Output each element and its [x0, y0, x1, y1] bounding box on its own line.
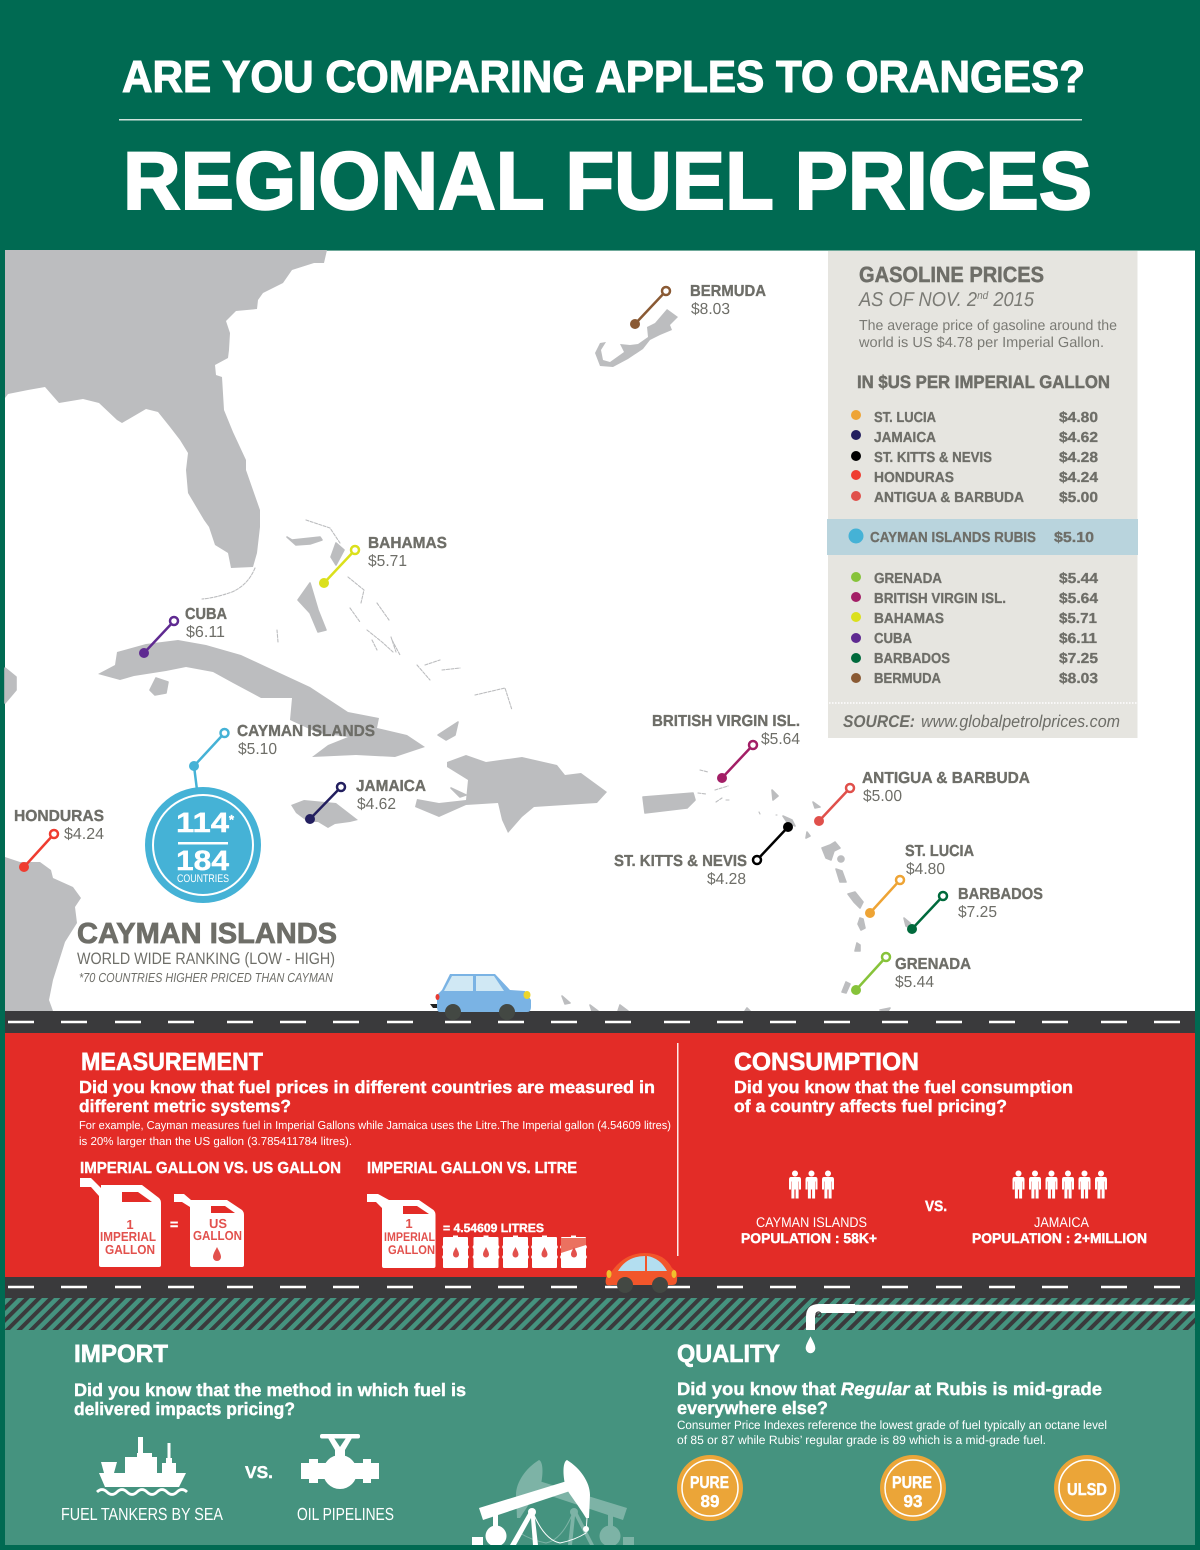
icon: oil pumpjack	[472, 1460, 590, 1546]
measurement question: Did you know that fuel prices in different countries are measured in	[79, 1077, 655, 1097]
road: bottom	[5, 1277, 1195, 1298]
cayman ranking caption: *70 COUNTRIES HIGHER PRICED THAN CAYMAN	[79, 970, 334, 985]
table rows: cheaper: ST. LUCIA	[874, 410, 936, 426]
icon: imperial gallon can: GALLON	[105, 1242, 155, 1257]
jamaica population label: JAMAICA	[1034, 1214, 1090, 1230]
pin: grenada: GRENADA	[895, 956, 971, 973]
import question: delivered impacts pricing?	[74, 1399, 295, 1419]
icon: tanker ship	[97, 1437, 187, 1494]
table row: cayman highlight	[827, 519, 1138, 555]
icon: pipeline valve	[301, 1434, 379, 1489]
cayman ranking caption: WORLD WIDE RANKING (LOW - HIGH)	[77, 950, 335, 968]
table rows: cheaper: $4.62	[1059, 430, 1098, 446]
icon: blue car	[430, 974, 531, 1020]
jamaica population label	[972, 1214, 1147, 1246]
pin: barbados: BARBADOS	[958, 886, 1043, 903]
pin: cayman islands: $5.10	[238, 741, 277, 758]
table rows: cheaper: $5.00	[1059, 490, 1098, 506]
measurement body text: For example, Cayman measures fuel in Imperial Gallons while Jamaica uses the Litre.The Imperial gallon (4.54609 litres)	[79, 1120, 671, 1132]
panel: gasoline prices: world is US $4.78 per Imperial Gallon.	[858, 335, 1104, 351]
icon: litre drums	[442, 1236, 587, 1268]
pin: cayman islands: CAYMAN ISLANDS	[237, 723, 375, 740]
pin: antigua and barbuda: ANTIGUA & BARBUDA	[862, 770, 1030, 787]
source: SOURCE:	[843, 712, 915, 731]
map: caribbean land masses	[5, 250, 914, 1011]
badge: pure 89: 89	[701, 1492, 719, 1511]
map background	[5, 250, 1195, 1011]
pin: bermuda	[630, 283, 766, 329]
quality body text: of 85 or 87 while Rubis’ regular grade is 89 which is a mid-grade fuel.	[677, 1433, 1046, 1447]
icon: cayman population	[789, 1170, 834, 1198]
ranking badge	[145, 787, 261, 903]
pin: jamaica: JAMAICA	[356, 778, 426, 795]
import question	[74, 1380, 466, 1419]
badge: pure 93: PURE	[892, 1473, 932, 1492]
panel: red measurement and consumption	[5, 1033, 1195, 1277]
table rows: dearer: BAHAMAS	[874, 611, 944, 627]
icon: imperial gallon can: IMPERIAL	[100, 1229, 156, 1244]
table rows: cheaper	[851, 410, 1098, 506]
icon: oil pumpjack ghost	[516, 1460, 634, 1546]
table heading: IN $US PER IMPERIAL GALLON	[857, 372, 1110, 392]
cayman population label: POPULATION : 58K+	[741, 1230, 877, 1246]
table rows: cheaper: JAMAICA	[874, 430, 936, 446]
ranking badge: 184	[176, 845, 229, 876]
pin: british virgin islands: $5.64	[761, 731, 800, 748]
icon: imperial gallon can 2	[367, 1194, 436, 1268]
pin: bahamas: $5.71	[368, 553, 407, 570]
icon: jamaica population	[1012, 1170, 1107, 1198]
quality question	[677, 1379, 1102, 1418]
icon: us gallon can: GALLON	[193, 1228, 242, 1243]
panel intro text: The average price of gasoline around the	[859, 318, 1117, 334]
table row: cayman highlight: CAYMAN ISLANDS RUBIS	[870, 530, 1036, 546]
pin: cuba: $6.11	[186, 624, 225, 641]
jamaica population label: POPULATION : 2+MILLION	[972, 1230, 1147, 1246]
icon: imperial gallon can 2: GALLON	[388, 1243, 435, 1257]
table rows: dearer: $6.11	[1059, 631, 1097, 647]
icon: imperial gallon can	[80, 1178, 161, 1267]
quality body text	[677, 1418, 1107, 1447]
pin: cuba: CUBA	[185, 606, 227, 623]
bahamas islands	[298, 583, 326, 632]
pin: barbados	[907, 886, 1043, 934]
panel: teal import and quality	[5, 1298, 1195, 1545]
litres label: = 4.54609 LITRES	[443, 1221, 544, 1235]
pin: grenada: $5.44	[895, 974, 934, 991]
panel: gasoline prices	[827, 251, 1138, 738]
badge: pure 89	[677, 1455, 743, 1521]
icon: us gallon can: US	[209, 1216, 227, 1231]
pin: cayman islands	[189, 723, 375, 790]
consumption question: of a country affects fuel pricing?	[734, 1096, 1007, 1116]
measurement question	[79, 1077, 655, 1116]
panel date: nd	[977, 290, 989, 302]
ranking badge: *	[229, 812, 235, 827]
table rows: dearer: BARBADOS	[874, 651, 950, 667]
table rows: cheaper: $4.24	[1059, 470, 1098, 486]
badge: pure 93: 93	[904, 1492, 922, 1511]
pin: grenada	[851, 953, 971, 995]
consumption question: Did you know that the fuel consumption	[734, 1077, 1073, 1097]
table rows: dearer: $8.03	[1059, 671, 1098, 687]
icon: imperial gallon can: 1	[126, 1217, 134, 1232]
pipelines label: OIL PIPELINES	[297, 1504, 394, 1524]
pin: st kitts and nevis	[614, 822, 793, 888]
pin: bermuda: BERMUDA	[690, 283, 766, 300]
pin: honduras: $4.24	[64, 826, 104, 843]
pin: british virgin islands: BRITISH VIRGIN ISL.	[652, 713, 800, 730]
icon: imperial gallon can 2: IMPERIAL	[384, 1230, 435, 1244]
tanker label: FUEL TANKERS BY SEA	[61, 1504, 223, 1524]
ranking badge: 114	[176, 807, 230, 838]
pin: bahamas: BAHAMAS	[368, 535, 447, 552]
table rows: dearer: CUBA	[874, 631, 912, 647]
pin: bermuda: $8.03	[691, 301, 730, 318]
quality body text: Consumer Price Indexes reference the lowest grade of fuel typically an octane level	[677, 1418, 1107, 1432]
table rows: dearer: $7.25	[1059, 651, 1098, 667]
measurement heading: MEASUREMENT	[81, 1048, 263, 1076]
pin: st kitts and nevis: ST. KITTS & NEVIS	[614, 853, 747, 870]
table rows: cheaper: $4.28	[1059, 450, 1098, 466]
cayman ranking caption: CAYMAN ISLANDS	[77, 918, 337, 950]
quality question: Did you know that Regular at Rubis is mid-grade	[677, 1379, 1102, 1399]
icon: red car	[606, 1253, 677, 1293]
road: top	[5, 1011, 1195, 1033]
table rows: dearer: $5.64	[1059, 591, 1098, 607]
header	[119, 51, 1092, 227]
badge: pure 93	[880, 1455, 946, 1521]
lesser antilles	[562, 790, 914, 1011]
measurement body text: is 20% larger than the US gallon (3.785411784 litres).	[79, 1136, 352, 1148]
divider	[677, 1043, 678, 1256]
badge: ulsd	[1054, 1455, 1120, 1521]
table rows: dearer: BERMUDA	[874, 671, 941, 687]
cayman population label	[741, 1214, 877, 1246]
panel date: 2015	[988, 289, 1035, 311]
table rows: dearer: GRENADA	[874, 571, 942, 587]
icon: pipe with drip	[806, 1304, 1195, 1353]
table rows: cheaper: ST. KITTS & NEVIS	[874, 450, 992, 466]
equals sign: =	[170, 1216, 178, 1232]
table rows: dearer: BRITISH VIRGIN ISL.	[874, 591, 1006, 607]
pin: antigua and barbuda: $5.00	[863, 788, 902, 805]
table rows: dearer: $5.44	[1059, 571, 1098, 587]
subheading: imperial vs litre: IMPERIAL GALLON VS. LITRE	[367, 1160, 577, 1177]
consumption question	[734, 1077, 1073, 1116]
table rows: cheaper: HONDURAS	[874, 470, 954, 486]
pin: bahamas	[319, 535, 447, 588]
subheading: imperial vs us: IMPERIAL GALLON VS. US GALLON	[80, 1160, 341, 1177]
pin: jamaica: $4.62	[357, 796, 396, 813]
pin: st kitts and nevis: $4.28	[707, 871, 746, 888]
cayman ranking caption	[77, 918, 337, 985]
icon: us gallon can	[174, 1194, 244, 1267]
panel date: AS OF NOV. 2	[859, 289, 988, 311]
title: are you comparing: ARE YOU COMPARING APPLES TO ORANGES?	[122, 51, 1085, 102]
pin: british virgin islands	[652, 713, 800, 783]
panel: gasoline prices: www.globalpetrolprices.com	[921, 712, 1120, 731]
table row: cayman highlight: $5.10	[1054, 530, 1094, 546]
table rows: dearer: $5.71	[1059, 611, 1097, 627]
quality heading: QUALITY	[677, 1340, 780, 1368]
pin: st lucia: ST. LUCIA	[905, 843, 974, 860]
pin: st lucia: $4.80	[906, 861, 945, 878]
pin: st lucia	[865, 843, 974, 918]
table rows: cheaper: $4.80	[1059, 410, 1098, 426]
pin: antigua and barbuda	[814, 770, 1030, 826]
cayman population label: CAYMAN ISLANDS	[756, 1214, 867, 1230]
pin: cuba	[139, 606, 227, 658]
pin: honduras: HONDURAS	[14, 808, 104, 825]
badge: pure 89: PURE	[690, 1473, 729, 1492]
pin: jamaica	[305, 778, 426, 824]
measurement body text	[79, 1120, 671, 1148]
quality question: everywhere else?	[677, 1398, 828, 1418]
pin: barbados: $7.25	[958, 904, 997, 921]
import question: Did you know that the method in which fuel is	[74, 1380, 466, 1400]
import vs: VS.	[245, 1463, 273, 1482]
ranking badge: COUNTRIES	[177, 873, 229, 885]
icon: imperial gallon can 2: 1	[405, 1216, 413, 1231]
badge: ulsd: ULSD	[1067, 1480, 1107, 1499]
table rows: dearer	[851, 571, 1098, 687]
bermuda	[595, 309, 678, 367]
pin: honduras	[14, 808, 104, 872]
table rows: cheaper: ANTIGUA & BARBUDA	[874, 490, 1025, 506]
title: regional fuel prices: REGIONAL FUEL PRICES	[123, 136, 1092, 227]
panel heading: GASOLINE PRICES	[859, 262, 1044, 287]
import heading: IMPORT	[74, 1340, 168, 1368]
measurement question: different metric systems?	[79, 1096, 291, 1116]
consumption vs: VS.	[925, 1198, 947, 1215]
consumption heading: CONSUMPTION	[734, 1048, 919, 1076]
